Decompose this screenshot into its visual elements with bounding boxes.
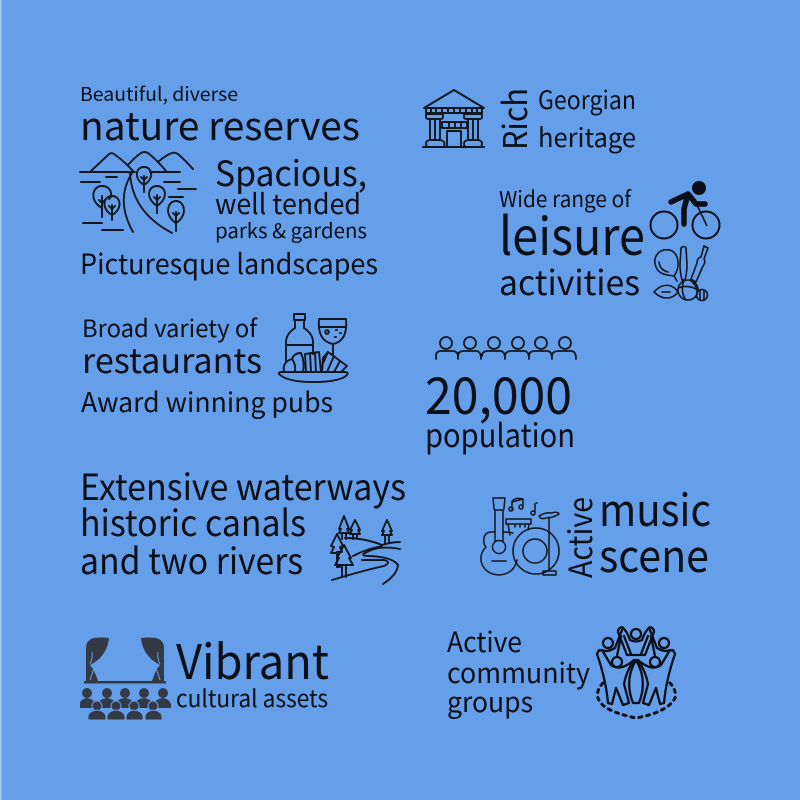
text block: active music scene	[556, 475, 711, 585]
icon: community group of people in circle	[597, 627, 675, 718]
text: rich georgian heritage	[489, 81, 636, 155]
text block: nature reserves: Beautiful, diverse	[80, 80, 238, 107]
text block: waterways: Extensive waterways	[80, 459, 406, 511]
icon: guitar, drums and music notes	[481, 498, 559, 575]
icon: georgian building	[423, 90, 484, 147]
text block: active music scene: Active	[556, 497, 602, 578]
icon: row of people	[436, 337, 576, 359]
text block: parks and gardens	[215, 146, 367, 244]
text block: active community groups: Active	[447, 621, 522, 661]
text: rich georgian heritage: Rich	[489, 88, 537, 150]
text block: active community groups: community	[447, 652, 590, 692]
text block: active music scene: music	[599, 475, 711, 539]
icon: cyclist	[650, 181, 720, 238]
text block: restaurants: Broad variety of	[82, 309, 258, 344]
text block: vibrant cultural assets: cultural assets	[176, 679, 328, 714]
text block: waterways: historic canals	[80, 495, 306, 547]
text block: active music scene: scene	[599, 521, 709, 585]
icon: wine bottle, glass and food platter	[279, 314, 348, 382]
text block: vibrant cultural assets: Vibrant	[176, 623, 329, 693]
icon: river and pine trees	[331, 516, 400, 584]
text block: restaurants: restaurants	[82, 334, 262, 383]
text block: population: 20,000	[425, 355, 572, 429]
text: picturesque landscapes: Picturesque landscapes	[80, 243, 378, 283]
text block: leisure activities: activities	[499, 256, 640, 305]
text block: restaurants: Award winning pubs	[81, 381, 333, 420]
text block: parks and gardens: parks & gardens	[215, 215, 367, 244]
text block: leisure activities: leisure	[499, 195, 645, 270]
icon: landscape with hills, road and trees	[80, 152, 196, 233]
text: rich georgian heritage: heritage	[538, 118, 636, 155]
text block: parks and gardens: well tended	[215, 183, 361, 223]
icon: sports equipment	[654, 246, 708, 300]
text block: leisure activities	[499, 182, 645, 305]
text: rich georgian heritage: Georgian	[538, 81, 636, 117]
text block: active community groups: groups	[447, 681, 533, 721]
text block: population: population	[425, 411, 575, 457]
text block: active community groups	[447, 621, 590, 721]
text block: waterways	[80, 459, 406, 585]
icon: theatre stage and audience	[80, 638, 171, 720]
text block: restaurants	[81, 309, 333, 420]
text block: waterways: and two rivers	[80, 533, 303, 585]
text block: nature reserves: nature reserves	[80, 96, 360, 152]
text block: parks and gardens: Spacious,	[215, 146, 367, 197]
text block: leisure activities: Wide range of	[499, 182, 632, 214]
